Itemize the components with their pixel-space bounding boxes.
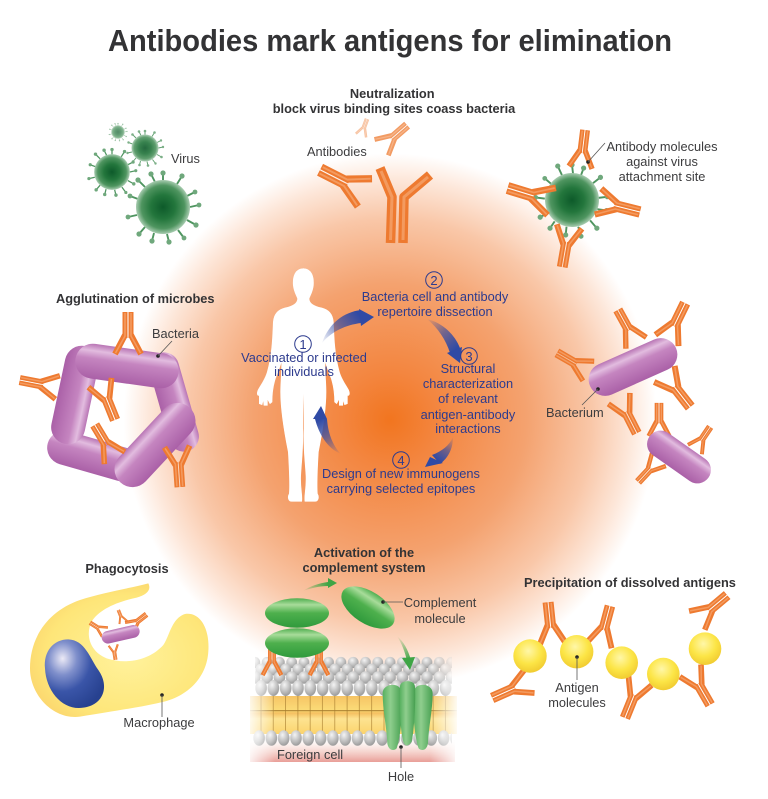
icon: antibody 7: [688, 422, 717, 454]
step 3: of relevant: [438, 391, 498, 406]
step 3: characterization: [423, 376, 513, 391]
icon: antigen sphere 3: [605, 646, 638, 679]
icon: antibody 5: [608, 393, 648, 439]
heading: precipitation: Precipitation of dissolved antigens: [524, 575, 736, 590]
icon: complement molecule bound: [265, 628, 329, 658]
step 4: [322, 452, 480, 496]
step 1: individuals: [274, 364, 334, 379]
step 2: repertoire dissection: [377, 304, 493, 319]
title: Antibodies mark antigens for elimination: [108, 23, 672, 58]
step 3: Structural: [441, 361, 495, 376]
icon: antibody 3: [551, 343, 594, 381]
icon: antibody 8: [631, 453, 666, 488]
label: antigen molecules: molecules: [548, 695, 606, 710]
arrow: step 2 to 3: [427, 319, 462, 363]
icon: large antibody: [380, 168, 430, 243]
panel: bacterium: [546, 297, 717, 489]
icon: antibody inner bottom: [84, 419, 125, 464]
icon: antigen sphere 1: [513, 639, 547, 673]
heading: phagocytosis: Phagocytosis: [85, 561, 169, 576]
heading: neutralization: block virus binding sites coass bacteria: [273, 101, 516, 116]
step 4: carrying selected epitopes: [327, 481, 475, 496]
icon: antibody 3: [613, 676, 652, 723]
label: antibody molecules: Antibody molecules: [607, 139, 717, 154]
step 3: interactions: [435, 421, 501, 436]
step 4: Design of new immunogens: [322, 466, 480, 481]
icon: medium virus: [87, 148, 137, 197]
icon: antigen sphere 5: [689, 632, 721, 665]
heading: activation of the complement system: Activation of the: [314, 545, 414, 560]
label: bacterium: Bacterium: [546, 405, 604, 420]
icon: antibody 2: [587, 603, 622, 648]
icon: medium antibody: [313, 156, 372, 207]
leader to label: [160, 693, 164, 717]
icon: complement molecule free: [334, 578, 402, 637]
panel: phagocytosis: [30, 561, 208, 730]
icon: antibody bottom: [550, 224, 582, 269]
icon: antibody 6: [487, 670, 535, 710]
icon: macrophage: [30, 583, 208, 717]
icon: antigen sphere 4: [647, 658, 680, 690]
label: antibodies: Antibodies: [307, 144, 367, 159]
label: hole: Hole: [388, 769, 414, 784]
step 3: [421, 348, 516, 436]
step 1: 1: [299, 337, 307, 352]
arrow: step 1 to 2: [322, 309, 374, 343]
label: antibody molecules: against virus: [626, 154, 698, 169]
icon: antibody top: [115, 312, 141, 354]
heading: neutralization: Neutralization: [350, 86, 435, 101]
leader to hole label: [399, 745, 403, 768]
icon: antibody bottom right: [164, 446, 192, 488]
label: complement molecule: molecule: [414, 611, 466, 626]
leader to label: [586, 143, 605, 164]
step 2: [362, 272, 509, 319]
icon: antibody 4: [654, 366, 700, 415]
label: complement molecule: Complement: [404, 595, 477, 610]
step 1: Vaccinated or infected: [241, 350, 367, 365]
human silhouette: [257, 269, 349, 501]
icon: light antibody: [375, 117, 414, 155]
panel: virus with antibodies: [503, 129, 717, 269]
arrow: step 3 to 4: [425, 437, 453, 467]
label: macrophage: Macrophage: [123, 715, 195, 730]
label: antibody molecules: attachment site: [619, 169, 705, 184]
label: virus: Virus: [171, 151, 200, 166]
heading: agglutination: Agglutination of microbes: [56, 291, 215, 306]
arrow: release: [303, 578, 337, 591]
icon: antibody 1: [608, 304, 646, 349]
leader to label: [582, 387, 600, 405]
heading: activation of the complement system: complement system: [302, 560, 426, 575]
icon: complement molecule stacked: [265, 598, 329, 628]
icon: membrane pore: [383, 681, 433, 750]
arrow: insertion: [397, 636, 415, 670]
step 2: 2: [430, 273, 438, 288]
icon: membrane antibody right: [310, 645, 328, 675]
membrane: [250, 656, 457, 762]
icon: antibody 6: [649, 403, 669, 436]
bacteria ring: [43, 341, 203, 495]
label: foreign cell: Foreign cell: [277, 747, 343, 762]
label: bacteria: Bacteria: [152, 326, 200, 341]
icon: membrane antibody left: [263, 645, 281, 675]
icon: antibody 4: [680, 664, 721, 711]
step 3: antigen-antibody: [421, 407, 516, 422]
panel: complement system: [250, 545, 477, 784]
leader to label: [156, 341, 172, 358]
icon: antibody 2: [655, 297, 697, 346]
panel: virus: [87, 123, 201, 245]
leader to complement label: [381, 600, 403, 604]
icon: large virus: [126, 170, 201, 245]
arrow: step 4 to 1: [313, 406, 341, 454]
icon: antibody left: [503, 174, 556, 215]
icon: large bacterium: [583, 333, 683, 401]
icon: antibody 1: [535, 601, 565, 645]
icon: antigen sphere 2: [560, 635, 593, 668]
icon: antibody top: [569, 129, 597, 169]
label: antigen molecules: Antigen: [555, 680, 599, 695]
leader to label: [575, 655, 579, 680]
icon: antibody inner top: [88, 378, 127, 425]
step 3: 3: [465, 349, 473, 364]
panel: precipitation of dissolved antigens: [487, 575, 736, 723]
icon: small virus: [126, 130, 164, 167]
panel: neutralization: [273, 86, 516, 243]
icon: antibody left: [17, 368, 60, 399]
icon: antibody 5: [689, 586, 735, 630]
panel: agglutination of microbes: [17, 291, 215, 495]
icon: faint antibody: [356, 117, 372, 137]
step 2: Bacteria cell and antibody: [362, 289, 509, 304]
step 4: 4: [397, 453, 405, 468]
icon: tiny virus: [109, 123, 128, 141]
step 1: [241, 336, 367, 379]
icon: virus at attachment site: [524, 153, 621, 248]
icon: antibody right: [595, 189, 643, 225]
panel: process cycle: [241, 269, 516, 501]
icon: small bacterium: [642, 425, 716, 489]
